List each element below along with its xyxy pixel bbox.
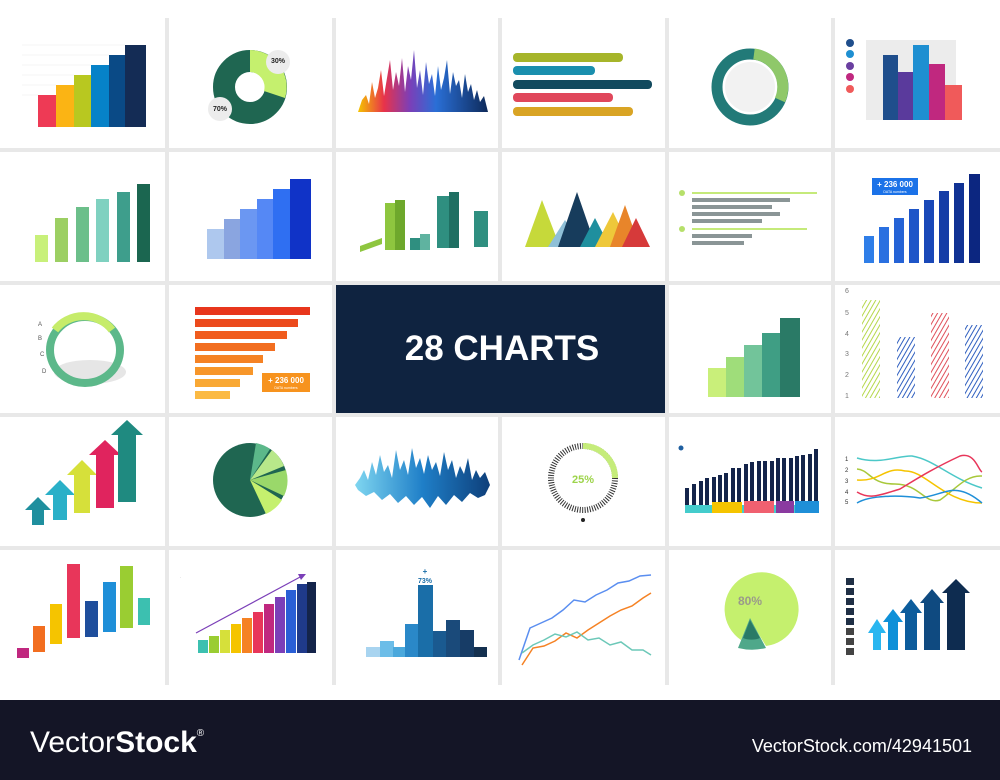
chart: wavy lines [845, 455, 982, 506]
chart: blue histogram 73%: + [423, 567, 428, 576]
chart: horizontal gray bars [679, 190, 817, 245]
chart: green stepped bars [708, 318, 800, 397]
chart: wavy lines: 5 [845, 500, 849, 506]
chart: sketchy bars: 3 [845, 351, 849, 358]
chart: stepped 3D bars [22, 45, 146, 127]
chart: sketchy bars: 6 [845, 288, 849, 295]
chart: orange horizontal bars: DATA numbers [274, 386, 298, 390]
chart: orange horizontal bars: + 236 000 [268, 376, 304, 385]
chart: 3D bars with legend dots [846, 39, 962, 120]
chart: rainbow spiky area [358, 50, 488, 112]
chart: blue waveform [355, 448, 490, 508]
chart: blue histogram 73% [366, 567, 487, 657]
chart: 3D ring: B [38, 336, 42, 342]
title panel [336, 285, 665, 413]
chart: 3D ring: D [42, 369, 47, 375]
chart: 3D ring [38, 316, 126, 384]
chart: 3D ring: C [40, 352, 45, 358]
chart: green 3D bars [35, 184, 150, 262]
chart: donut 70/30: 30% [271, 58, 286, 65]
chart: rainbow bars with trend arrow: - [180, 575, 181, 579]
chart: stacked bars [678, 446, 819, 513]
footer banner: VectorStock.com/42941501 [752, 736, 972, 756]
chart: blue stepped bars [207, 179, 311, 259]
chart: gauge 25% [551, 446, 615, 522]
chart: green 3D grouped bars [360, 192, 488, 252]
chart: pie [213, 443, 287, 517]
chart: 80% circle: 80% [738, 594, 762, 608]
chart: wavy lines: 2 [845, 468, 849, 474]
chart: wavy lines: 4 [845, 490, 849, 496]
chart: wavy lines: 1 [845, 457, 849, 463]
chart: sketchy bars: 1 [845, 393, 849, 400]
chart: blue increasing bars with label: + 236 000 [877, 180, 913, 189]
title panel: 28 CHARTS [405, 329, 599, 368]
chart: sketchy bars: 2 [845, 372, 849, 379]
chart: horizontal rounded bars [513, 53, 652, 116]
chart: sketchy bars [845, 288, 983, 400]
chart: growth arrows [25, 420, 143, 525]
chart: ring [717, 54, 783, 120]
chart: donut 70/30 [208, 50, 290, 121]
chart: wavy lines: 3 [845, 479, 849, 485]
chart: line chart [519, 575, 651, 665]
chart: gauge 25%: 25% [572, 474, 594, 486]
chart: blue histogram 73%: 73% [418, 578, 433, 585]
chart: rainbow bars with trend arrow [180, 574, 316, 653]
chart: sketchy bars: 4 [845, 331, 849, 338]
chart: blue increasing bars with label: DATA numbers [883, 190, 907, 194]
chart: sketchy bars: 5 [845, 310, 849, 317]
footer banner: ® [197, 728, 205, 739]
chart: mountain triangles [525, 192, 650, 247]
chart: orange horizontal bars [195, 307, 310, 399]
footer banner [0, 700, 1000, 780]
chart: donut 70/30: 70% [213, 106, 228, 113]
chart: 3D colored bars [17, 564, 150, 658]
chart: 80% circle [725, 572, 799, 650]
chart: blue arrows [846, 578, 970, 655]
footer banner: VectorStock [30, 726, 197, 759]
chart: blue increasing bars with label [864, 174, 980, 263]
chart: 3D ring: A [38, 322, 42, 328]
